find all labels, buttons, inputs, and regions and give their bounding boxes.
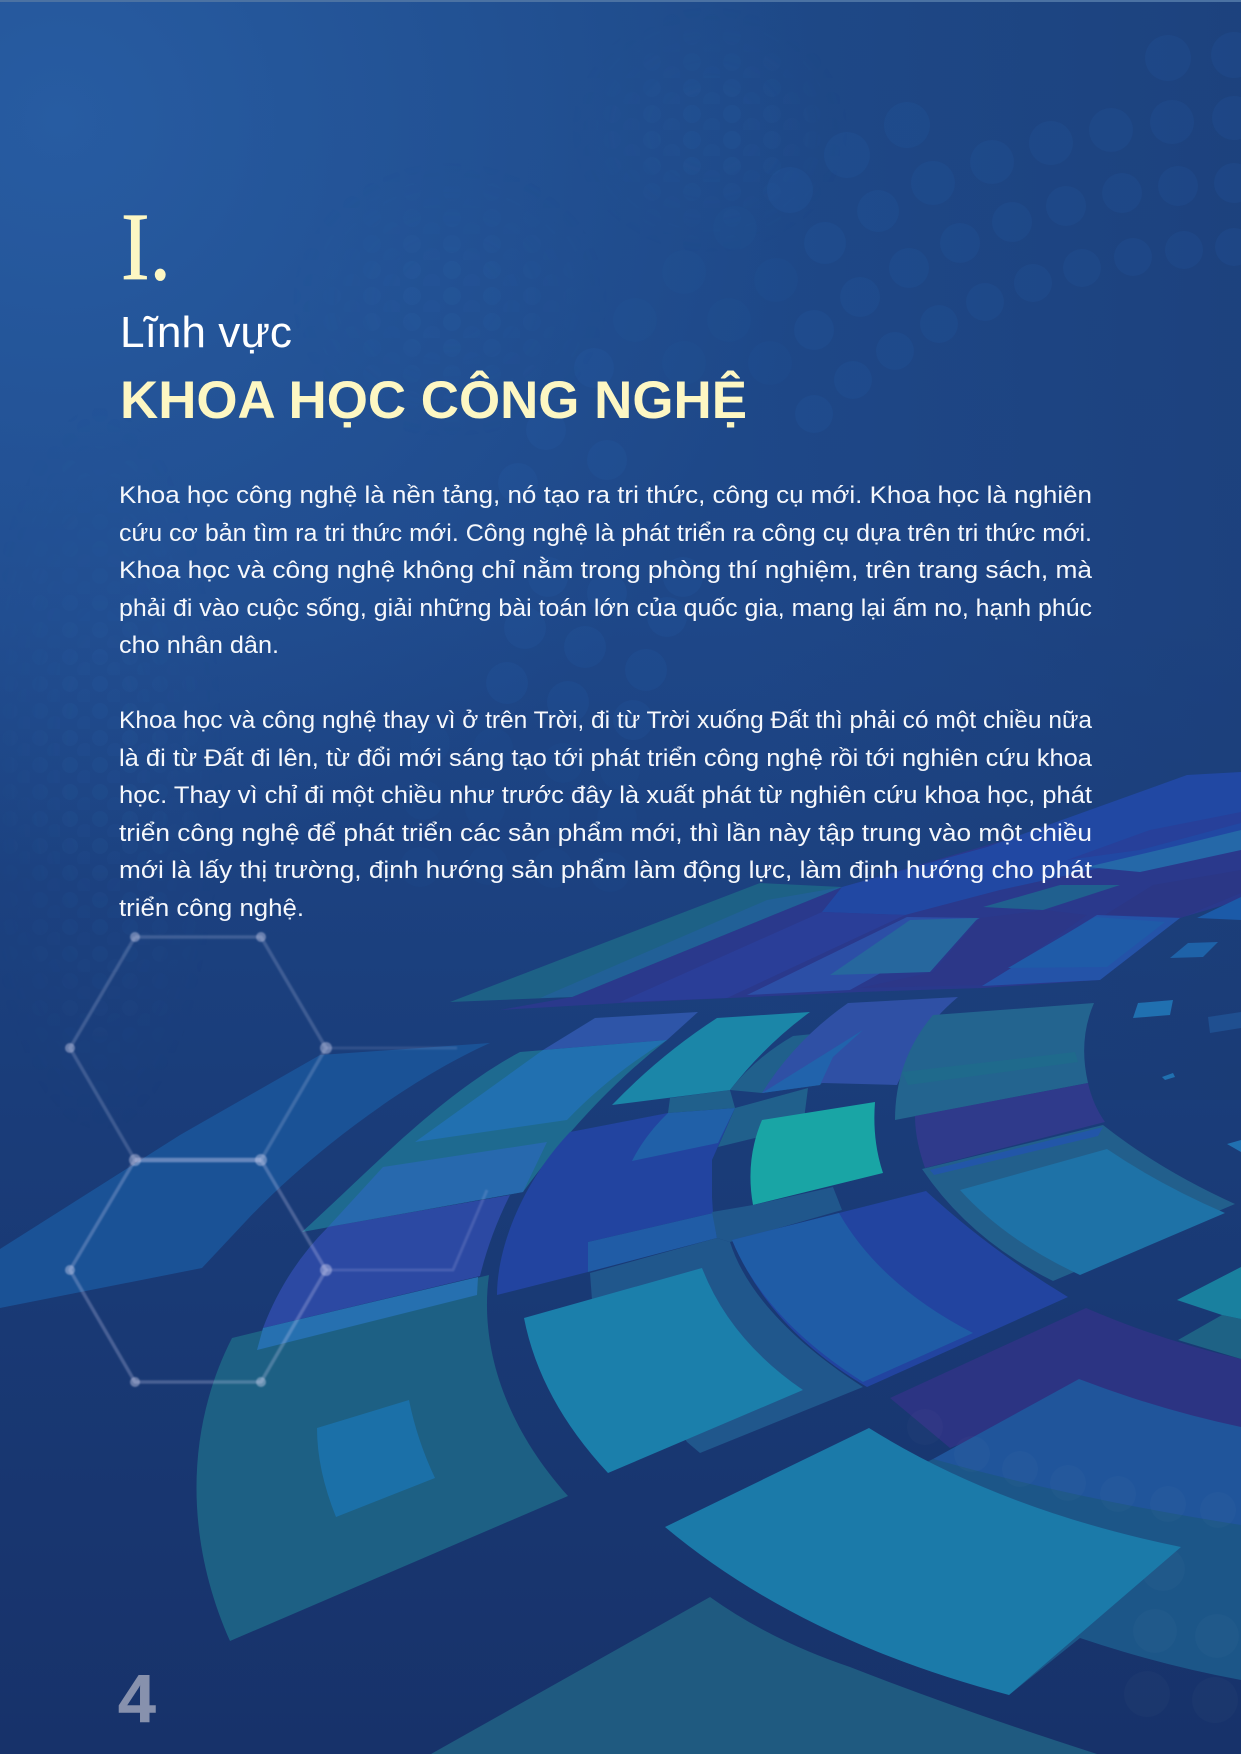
large cyan sector bbox=[524, 1268, 803, 1473]
body paragraph 2: học. Thay vì chỉ đi một chiều như trước đây là xuất phát từ nghiên cứu khoa học, phát bbox=[119, 782, 1092, 809]
lower right bands bbox=[850, 1308, 1241, 1723]
left teal sector bbox=[196, 1275, 568, 1641]
body paragraph 2: Khoa học và công nghệ thay vì ở trên Trời, đi từ Trời xuống Đất thì phải có một chiều nữa bbox=[119, 707, 1093, 734]
background dot pattern bbox=[266, 1006, 1056, 1655]
body paragraph 2: mới là lấy thị trường, định hướng sản phẩm làm động lực, làm định hướng cho phát bbox=[119, 857, 1092, 884]
body paragraph 1 bbox=[119, 482, 1093, 659]
body paragraph 2: là đi từ Đất đi lên, từ đổi mới sáng tạo tới phát triển công nghệ rồi tới nghiên cứu khoa bbox=[119, 745, 1093, 772]
ring 2: gray teal crescent bbox=[590, 1238, 863, 1453]
right edge teal tiles bbox=[1177, 1267, 1241, 1359]
dark centre small tiles bbox=[1133, 942, 1241, 1152]
ring 4: cyan inner tile bbox=[960, 1149, 1225, 1275]
page number: 4 bbox=[118, 1661, 156, 1737]
section number: I. bbox=[121, 193, 171, 300]
ring 4: teal gray tile bbox=[895, 1003, 1094, 1120]
ring 3: lighter tile bbox=[762, 1030, 863, 1093]
ring 4: purple tile bbox=[915, 1083, 1105, 1168]
bright cyan top tile bbox=[612, 1012, 810, 1105]
ring 3: blue tile bbox=[762, 997, 958, 1093]
bright teal highlighted tile bbox=[750, 1102, 883, 1205]
ring 2: blue tiles bbox=[497, 1090, 735, 1295]
body paragraph 1: phải đi vào cuộc sống, giải những bài toán lớn của quốc gia, mang lại ấm no, hạnh phúc bbox=[119, 595, 1092, 622]
bottom teal tile bbox=[431, 1597, 1097, 1754]
body paragraph 1: Khoa học và công nghệ không chỉ nằm trong phòng thí nghiệm, trên trang sách, mà bbox=[119, 557, 1093, 584]
body paragraph 1: cho nhân dân. bbox=[119, 632, 279, 659]
subtitle: Lĩnh vực bbox=[120, 308, 292, 357]
small blue square tile bbox=[317, 1400, 435, 1517]
ring 1: purple tile and lower strip bbox=[257, 1195, 510, 1350]
body paragraph 2: triển công nghệ để phát triển các sản phẩm mới, thì lần này tập trung vào một chiều bbox=[119, 820, 1092, 847]
ring 1: outer tile band bbox=[302, 1012, 698, 1232]
big cyan bottom tile bbox=[665, 1428, 1181, 1695]
hexagon network bbox=[65, 932, 487, 1387]
body paragraph 1: cứu cơ bản tìm ra tri thức mới. Công nghệ là phát triển ra công cụ dựa trên tri thức mới. bbox=[119, 520, 1092, 547]
ring 4: blue sliver bbox=[930, 1127, 1103, 1175]
ring 2 lower: lighter tile bbox=[732, 1213, 973, 1382]
top fan of perspective tiles bbox=[450, 772, 1241, 1010]
gray strip beneath bright tile bbox=[712, 1187, 842, 1242]
ring 4: gray lower band bbox=[922, 1125, 1235, 1281]
left pale swath bbox=[0, 1043, 490, 1308]
main heading: KHOA HỌC CÔNG NGHỆ bbox=[120, 369, 747, 430]
ring 4: dark strip bbox=[902, 1052, 1078, 1085]
ring 3: gray teal band bbox=[718, 1029, 863, 1147]
body paragraph 1: Khoa học công nghệ là nền tảng, nó tạo ra tri thức, công cụ mới. Khoa học là nghiên bbox=[119, 482, 1092, 509]
body paragraph 2: triển công nghệ. bbox=[119, 895, 304, 922]
ring 2 lower: blue tile bbox=[732, 1191, 1068, 1387]
body paragraph 2 bbox=[119, 707, 1093, 922]
